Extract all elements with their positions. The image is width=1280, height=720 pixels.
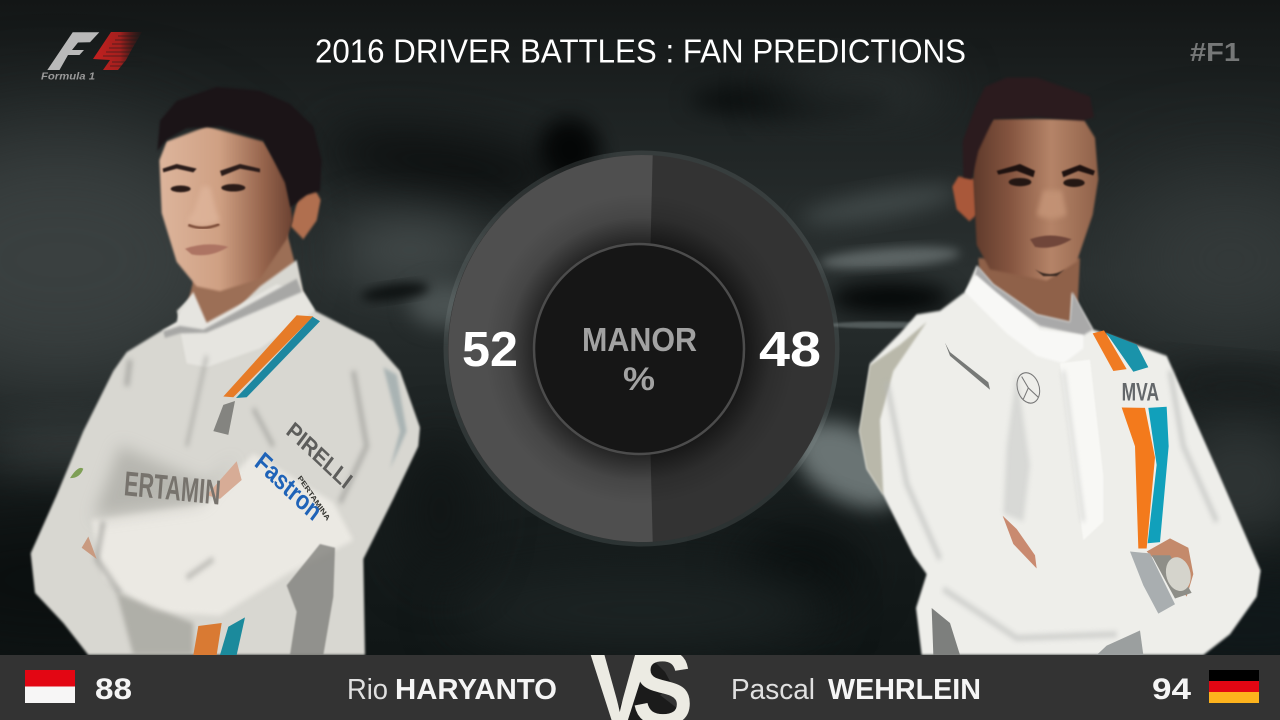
teal chest stripe [1148,407,1169,543]
value 48: 48 [759,323,821,377]
Fastron sleeve logo: Fastron [250,447,327,527]
face [973,119,1098,281]
Wehrlein number: 94 [1152,673,1191,706]
segment: Wehrlein 48 [448,155,835,542]
left hand [82,536,97,559]
driver portrait: Rio Haryanto [31,87,420,655]
suit [31,260,420,655]
segment: Haryanto 52 [448,155,653,542]
Mercedes star [1013,368,1044,407]
F1 logo: Formula 1 [41,72,95,82]
Indonesia flag [25,670,75,703]
bottom driver bar [0,655,1280,720]
liner panel [859,322,927,495]
collar trim [975,266,1093,335]
PERTAMINA sleeve text: PERTAMINA [296,474,332,522]
orange collar stripe [1093,330,1127,371]
Haryanto first name: Rio [347,674,388,706]
collar [162,284,315,367]
team label: MANOR [582,321,697,358]
teal lower stripe [220,617,245,655]
VS backing [612,655,682,720]
driver portrait: Pascal Wehrlein [859,78,1261,655]
suit [859,266,1261,655]
collar [965,275,1083,363]
right hand [1147,538,1193,597]
shoulder seam [945,343,990,390]
face [159,126,293,291]
chest badge [213,401,235,435]
team badge: MVA [1122,378,1159,406]
ear [291,190,321,239]
hair [157,87,322,207]
Germany flag [1209,670,1259,703]
watch [1152,553,1195,599]
arm highlight [92,454,353,615]
title: 2016 DRIVER BATTLES : FAN PREDICTIONS [315,32,966,70]
facial features [997,164,1095,276]
F1 logo [41,32,142,82]
suit fold shading [97,356,367,593]
Wehrlein surname: WEHRLEIN [828,674,981,706]
donut halo [444,150,840,546]
lower sponsor pattern [932,608,960,655]
PERTAMINA chest text: ERTAMIN [123,463,222,512]
neck [978,258,1080,326]
ear [952,176,977,221]
zip placket [1060,360,1103,540]
facial features [163,164,260,255]
lower body shadow [117,593,193,655]
inner shadow ring [446,155,834,543]
hashtag: #F1 [1190,37,1240,67]
Wehrlein first name: Pascal [731,674,815,706]
PIRELLI sleeve logo: PIRELLI [282,417,357,494]
sleeve cuff [1130,552,1175,614]
orange shoulder stripe [223,315,313,397]
donut chart [444,150,840,546]
side sponsor pattern [287,544,335,655]
lower cuff fabric [1097,631,1143,655]
collar trim [163,279,302,338]
suit fold shading [887,371,1217,638]
teal shoulder stripe [236,317,320,398]
value 52: 52 [462,323,518,377]
left hand [1003,516,1037,568]
centre disc [534,244,744,454]
Haryanto number: 88 [95,673,132,706]
chest shadow [93,446,237,518]
hand [207,461,242,499]
torso shadow [1003,371,1030,521]
sleeve shadow [383,367,407,469]
percent label: % [623,361,655,397]
neck [183,232,303,330]
hair [963,78,1094,179]
green sponsor mark [70,468,83,478]
Haryanto surname: HARYANTO [395,674,557,706]
orange lower stripe [193,623,222,655]
teal collar stripe [1106,333,1148,372]
orange chest stripe [1122,407,1155,549]
